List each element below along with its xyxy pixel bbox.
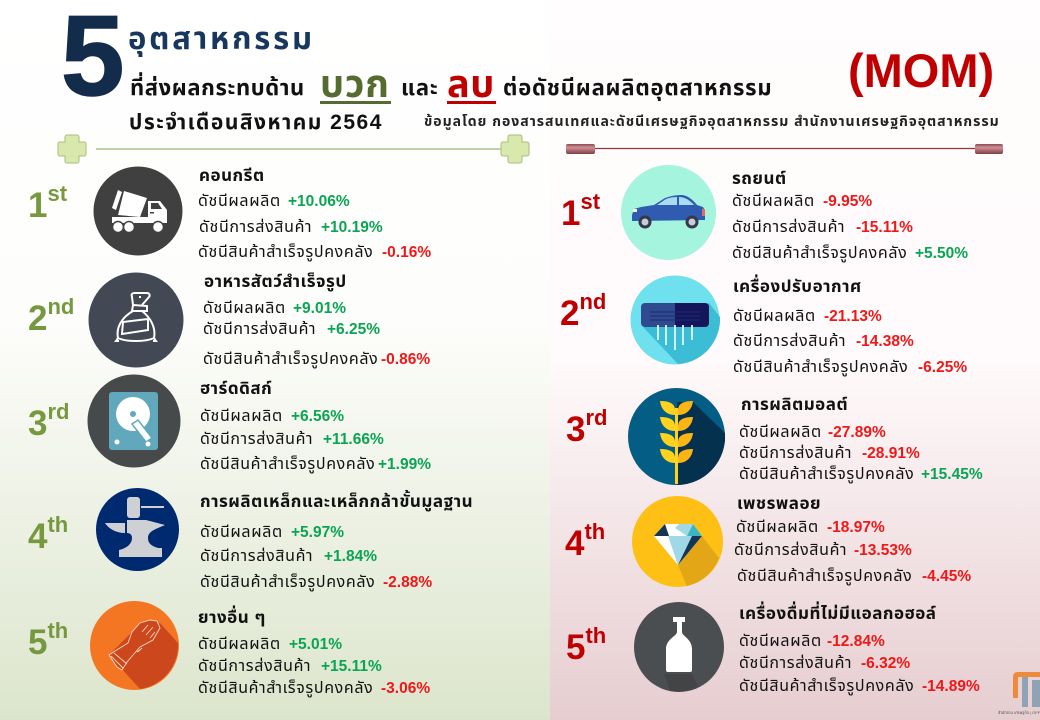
MOM label: (MOM) <box>848 44 994 97</box>
item: cars: +5.50% <box>915 245 968 262</box>
item: soft drinks: เครื่องดื่มที่ไม่มีแอลกอฮอล์ <box>739 604 936 623</box>
divider: negative <box>566 144 1003 154</box>
icon: hard disk <box>88 374 180 468</box>
item: hard disk: ฮาร์ดดิสก์ <box>200 379 272 398</box>
item: hard disk: +1.99% <box>378 456 431 473</box>
icon: cement truck <box>94 166 182 256</box>
item: jewellery: ดัชนีสินค้าสำเร็จรูปคงคลัง <box>737 568 912 585</box>
item: hard disk: ดัชนีการส่งสินค้า <box>200 431 313 448</box>
item: basic iron and steel: การผลิตเหล็กและเหล็กกล้าขั้นมูลฐาน <box>200 492 473 511</box>
item: soft drinks: -14.89% <box>922 678 980 695</box>
item: animal feed: ดัชนีผลผลิต <box>203 300 286 317</box>
logo <box>1013 672 1040 707</box>
item: animal feed: -0.86% <box>381 351 430 368</box>
right rank labels: 5th <box>566 623 606 667</box>
item: other rubber: ดัชนีสินค้าสำเร็จรูปคงคลัง <box>198 680 373 697</box>
item: air conditioners: ดัชนีการส่งสินค้า <box>733 333 846 350</box>
item: basic iron and steel <box>200 490 473 592</box>
item: concrete: ดัชนีสินค้าสำเร็จรูปคงคลัง <box>198 244 373 261</box>
item: other rubber: -3.06% <box>381 680 430 697</box>
item: hard disk: +6.56% <box>291 408 344 425</box>
item: soft drinks: -6.32% <box>861 655 910 672</box>
icon: diamond <box>632 496 723 587</box>
item: jewellery: เพชรพลอย <box>737 494 821 513</box>
item: hard disk: ดัชนีผลผลิต <box>200 408 283 425</box>
item: concrete: ดัชนีการส่งสินค้า <box>199 219 312 236</box>
right rank labels: 3rd <box>566 405 607 449</box>
item: malt: -28.91% <box>862 445 920 462</box>
item: air conditioners: เครื่องปรับอากาศ <box>733 277 862 296</box>
icon: anvil <box>96 488 179 571</box>
item: animal feed: ดัชนีการส่งสินค้า <box>203 321 316 338</box>
item: other rubber: +15.11% <box>321 658 382 675</box>
left rank labels: 2nd <box>28 294 74 338</box>
item: other rubber <box>198 605 430 698</box>
item: basic iron and steel: ดัชนีสินค้าสำเร็จรูปคงคลัง <box>200 574 375 591</box>
item: malt: -27.89% <box>828 424 886 441</box>
item: air conditioners <box>733 274 967 376</box>
icon: air conditioner <box>630 276 720 364</box>
title line 2: tail text: ต่อดัชนีผลผลิตอุตสาหกรรม <box>503 75 772 100</box>
item: cars: ดัชนีการส่งสินค้า <box>732 219 845 236</box>
item: hard disk: +11.66% <box>323 431 384 448</box>
item: cars: ดัชนีผลผลิต <box>732 193 815 210</box>
item: basic iron and steel: ดัชนีผลผลิต <box>200 524 283 541</box>
item: malt <box>739 395 983 484</box>
item: hard disk <box>200 379 431 474</box>
title line 2: and: และ <box>401 75 438 100</box>
item: malt: ดัชนีสินค้าสำเร็จรูปคงคลัง <box>739 466 914 483</box>
item: cars: ดัชนีสินค้าสำเร็จรูปคงคลัง <box>732 245 907 262</box>
item: concrete: -0.16% <box>382 244 431 261</box>
title line 3: ประจำเดือนสิงหาคม 2564 <box>129 111 383 134</box>
item: malt: +15.45% <box>921 466 983 483</box>
left background <box>0 0 550 720</box>
item: jewellery: -4.45% <box>922 568 971 585</box>
item: concrete <box>198 166 431 262</box>
item: other rubber: ดัชนีผลผลิต <box>198 636 281 653</box>
left rank labels: 3rd <box>28 399 69 443</box>
item: jewellery: -13.53% <box>854 542 912 559</box>
icon: bottle <box>634 602 724 692</box>
item: animal feed: +9.01% <box>293 300 346 317</box>
left rank labels: 1st <box>28 181 67 225</box>
item: cars: -15.11% <box>856 219 913 236</box>
right rank labels: 2nd <box>560 289 606 333</box>
item: basic iron and steel: +5.97% <box>291 524 344 541</box>
item: air conditioners: ดัชนีผลผลิต <box>733 308 816 325</box>
divider: positive <box>58 134 530 164</box>
item: other rubber: ดัชนีการส่งสินค้า <box>198 658 311 675</box>
title line 2: lead text: ที่ส่งผลกระทบด้าน <box>130 75 305 100</box>
item: concrete: ดัชนีผลผลิต <box>198 193 281 210</box>
item: malt: การผลิตมอลต์ <box>741 395 848 414</box>
right background <box>550 0 1040 720</box>
word: positive: บวก <box>320 64 390 106</box>
item: other rubber: ยางอื่น ๆ <box>198 608 266 627</box>
item: animal feed: อาหารสัตว์สำเร็จรูป <box>204 272 347 291</box>
item: basic iron and steel: -2.88% <box>383 574 432 591</box>
left rank labels: 4th <box>28 512 68 556</box>
left rank labels <box>28 181 74 662</box>
item: animal feed: ดัชนีสินค้าสำเร็จรูปคงคลัง <box>203 351 378 368</box>
source note: ข้อมูลโดย กองสารสนเทศและดัชนีเศรษฐกิจอุตสาหกรรม สำนักงานเศรษฐกิจอุตสาหกรรม <box>424 113 1000 129</box>
item: hard disk: ดัชนีสินค้าสำเร็จรูปคงคลัง <box>200 456 375 473</box>
item: cars: -9.95% <box>823 193 872 210</box>
right rank labels: 1st <box>561 189 600 233</box>
item: jewellery <box>734 494 971 586</box>
item: concrete: +10.19% <box>321 219 383 236</box>
item: air conditioners: ดัชนีสินค้าสำเร็จรูปคงคลัง <box>733 359 908 376</box>
item: concrete: +10.06% <box>288 193 350 210</box>
item: other rubber: +5.01% <box>289 636 342 653</box>
item: cars: รถยนต์ <box>732 169 787 188</box>
item: animal feed: +6.25% <box>327 321 380 338</box>
item: basic iron and steel: +1.84% <box>324 548 377 565</box>
item: jewellery: ดัชนีผลผลิต <box>736 519 819 536</box>
word: negative: ลบ <box>447 64 495 106</box>
item: malt: ดัชนีการส่งสินค้า <box>739 445 852 462</box>
icon: car <box>621 165 716 260</box>
item: soft drinks: ดัชนีสินค้าสำเร็จรูปคงคลัง <box>739 678 914 695</box>
item: soft drinks: ดัชนีผลผลิต <box>739 633 822 650</box>
icon: rubber glove <box>90 601 179 690</box>
item: animal feed <box>203 272 430 368</box>
item: malt: ดัชนีผลผลิต <box>739 424 822 441</box>
icon: feed bag <box>88 272 184 368</box>
item: cars <box>732 169 968 262</box>
icon: wheat <box>628 388 725 485</box>
item: air conditioners: -6.25% <box>918 359 967 376</box>
right rank labels: 4th <box>565 519 605 563</box>
item: air conditioners: -14.38% <box>856 333 914 350</box>
item: concrete: คอนกรีต <box>199 166 265 185</box>
item: soft drinks: -12.84% <box>827 633 885 650</box>
item: air conditioners: -21.13% <box>824 308 882 325</box>
item: jewellery: ดัชนีการส่งสินค้า <box>734 542 847 559</box>
item: soft drinks: ดัชนีการส่งสินค้า <box>739 655 852 672</box>
right rank labels <box>560 189 607 667</box>
title line 1: อุตสาหกรรม <box>128 21 315 56</box>
left rank labels: 5th <box>28 618 68 662</box>
item: basic iron and steel: ดัชนีการส่งสินค้า <box>200 548 313 565</box>
item: soft drinks <box>739 601 980 696</box>
item: jewellery: -18.97% <box>827 519 885 536</box>
